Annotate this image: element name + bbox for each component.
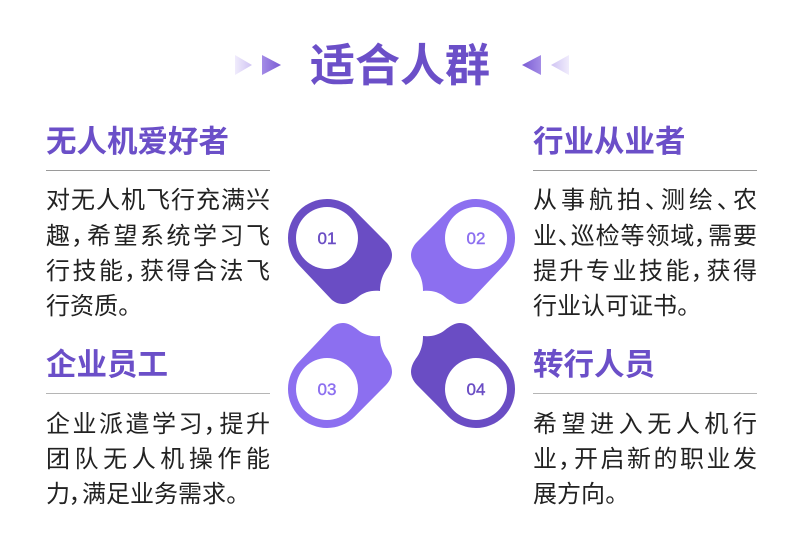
- text block: 团队无人机操作能: [46, 446, 270, 473]
- text block: 希望进入无人机行: [533, 411, 757, 438]
- title: 适合人群: [310, 40, 490, 91]
- petal 01: [288, 199, 392, 304]
- text block: 业，开启新的职业发: [533, 446, 757, 473]
- panel: 企业员工: [46, 348, 270, 508]
- heading: 企业员工: [46, 348, 168, 382]
- petal 03: [288, 323, 392, 428]
- text block: 企业派遣学习，提升: [46, 411, 270, 438]
- text block: 行资质。: [46, 293, 130, 320]
- petal 01: 01: [318, 229, 336, 248]
- text block: 对无人机飞行充满兴: [46, 187, 270, 214]
- text block: 提升专业技能，获得: [533, 258, 757, 285]
- text block: 从事航拍、测绘、农: [533, 187, 757, 214]
- text block: 力，满足业务需求。: [46, 481, 238, 508]
- text block: [533, 411, 757, 508]
- petal 02: 02: [467, 229, 485, 248]
- text block: 趣，希望系统学习飞: [46, 223, 270, 250]
- text block: [533, 187, 757, 320]
- panel: 无人机爱好者: [46, 125, 270, 320]
- text block: 展方向。: [533, 481, 617, 508]
- heading: 行业从业者: [533, 125, 686, 159]
- petal 03: 03: [318, 380, 336, 399]
- heading: 无人机爱好者: [46, 125, 229, 159]
- text block: [46, 187, 270, 320]
- text block: 行技能，获得合法飞: [46, 258, 270, 285]
- text block: 业、巡检等领域，需要: [533, 223, 757, 250]
- petal 02: [411, 199, 515, 304]
- text block: [46, 411, 270, 508]
- panel: 行业从业者: [533, 125, 757, 320]
- text block: 行业认可证书。: [533, 293, 689, 320]
- icon: left arrows: [235, 55, 281, 75]
- heading: 转行人员: [533, 348, 655, 382]
- petal 04: [411, 323, 515, 428]
- panel: 转行人员: [533, 348, 757, 508]
- icon: right arrows: [522, 55, 569, 75]
- petal 04: 04: [467, 380, 485, 399]
